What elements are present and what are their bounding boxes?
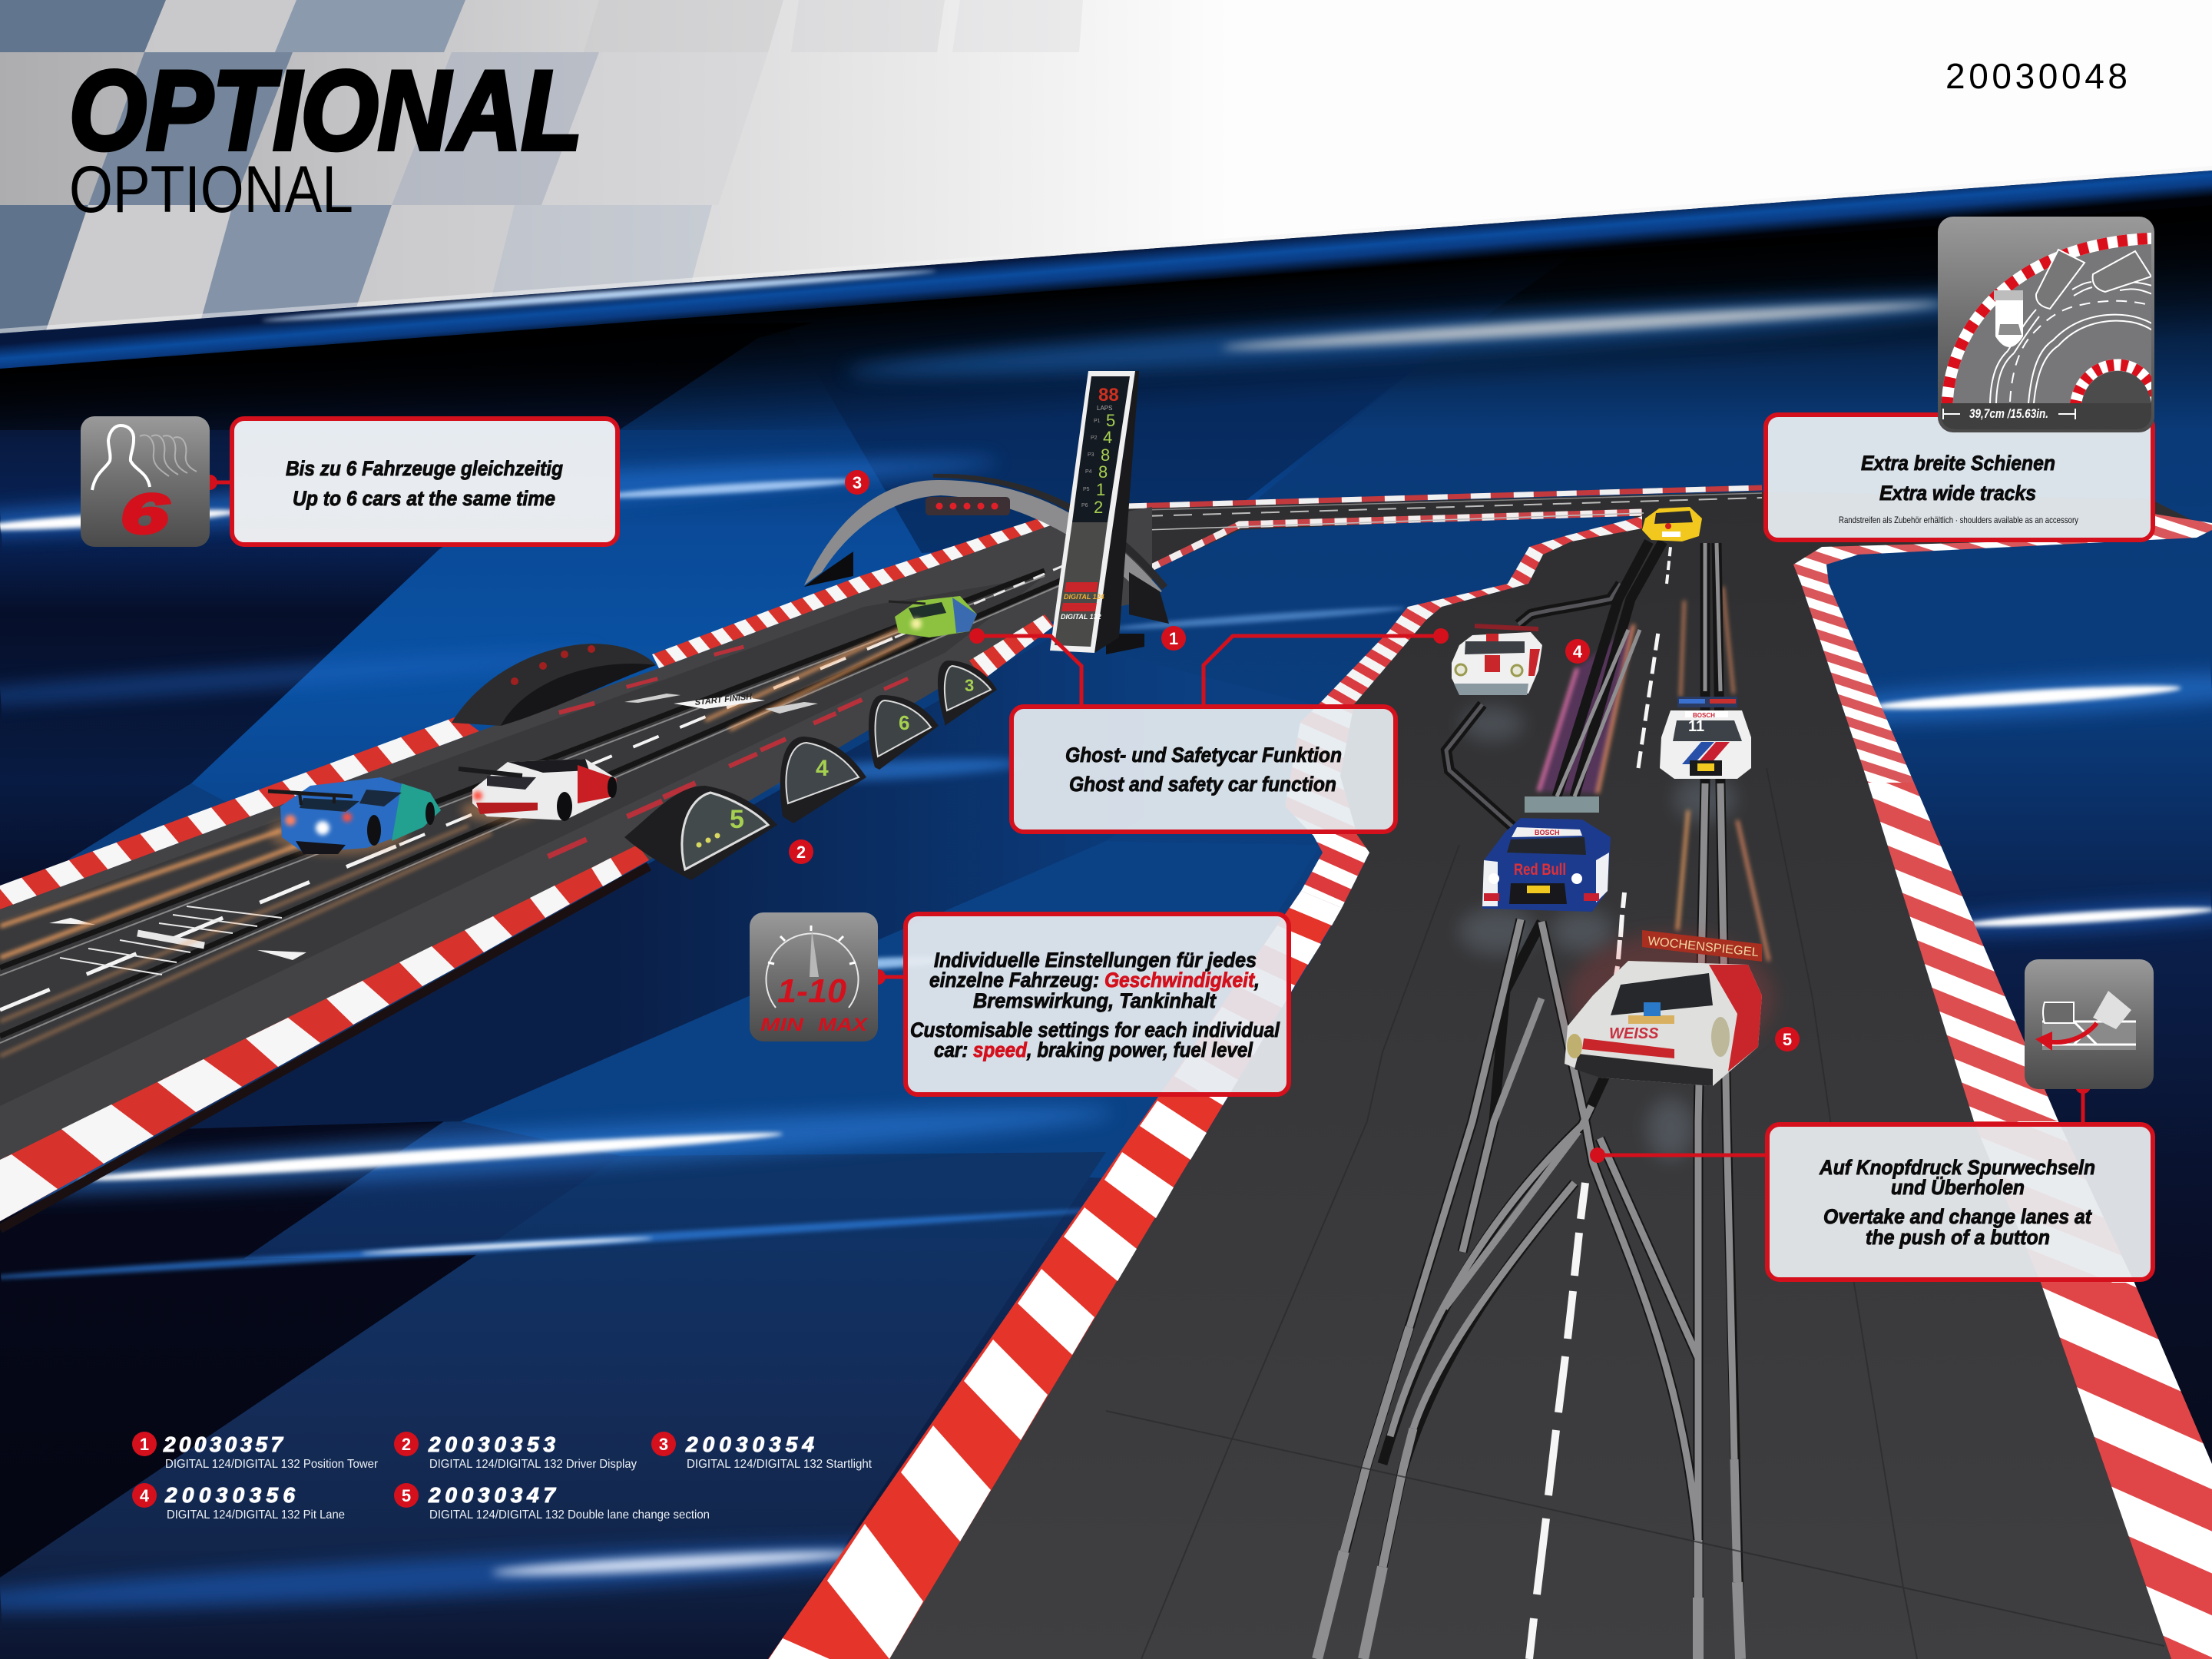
- left track kerbs: [0, 516, 1054, 1229]
- car: white Ferrari: [1565, 930, 1774, 1086]
- text: cars at the same time: [286, 457, 563, 510]
- text: lane change: Auf Knopfdruck Spurwechseln: [1819, 1156, 2095, 1179]
- badge 2: [789, 839, 813, 864]
- callout: lane change: [1590, 959, 2154, 1280]
- connector: [870, 969, 906, 985]
- icon: six drivers: [81, 416, 210, 547]
- text: lane change: und Überholen: [1891, 1176, 2025, 1199]
- car: white BMW safety car: BOSCH: [1693, 712, 1715, 719]
- position tower: 88: [1098, 385, 1119, 406]
- horizontal road lanes: [1144, 493, 1762, 530]
- start finish marking: [624, 692, 818, 714]
- car: white porsche: [1452, 624, 1542, 695]
- title: [69, 48, 582, 227]
- connector dot green car: [969, 628, 985, 644]
- position tower: P4: [1085, 469, 1092, 475]
- badge 3: [845, 470, 869, 495]
- dome 3: [869, 695, 939, 770]
- connector to green car: [977, 636, 1081, 705]
- legend item 5: 20030347: [428, 1483, 556, 1507]
- car: red white: [459, 759, 617, 822]
- connector dot white car: [1433, 628, 1449, 644]
- position tower: 2: [1094, 498, 1103, 517]
- car: white BMW safety car: [1660, 697, 1751, 779]
- startlight arch: [804, 474, 1169, 624]
- icon: speed gauge: [750, 912, 878, 1041]
- position tower: 4: [1103, 428, 1112, 447]
- panel: [906, 914, 1289, 1094]
- dome 4: 3: [965, 676, 974, 695]
- icon: wide curve: 39,7cm /15.63in.: [1969, 406, 2048, 421]
- legend item 5: DIGITAL 124/DIGITAL 132 Double lane change section: [429, 1508, 710, 1522]
- right track slots and lane change: [1106, 541, 2164, 1659]
- icon: lane change: [2025, 959, 2154, 1089]
- text: ghost function: Ghost and safety car function: [1069, 773, 1336, 796]
- badge 3: 3: [853, 473, 862, 492]
- text: settings: Individuelle Einstellungen für jedes: [934, 949, 1257, 972]
- right track centre dashes: [1529, 547, 1671, 1659]
- dome 2: 4: [816, 756, 829, 781]
- header panel with checkered flag: [0, 0, 2212, 333]
- arch bridge: [452, 644, 656, 726]
- title: OPTIONAL: [69, 48, 582, 173]
- track direction arrows: [49, 918, 306, 960]
- left track asphalt: [0, 507, 1152, 1221]
- right track kerbs: [768, 488, 2212, 1659]
- legend item 4: 4: [140, 1486, 150, 1505]
- icon: wide curve: [1938, 217, 2162, 434]
- pit lane slot: [1446, 584, 1621, 827]
- legend item 5: 5: [402, 1486, 411, 1505]
- position tower: P6: [1081, 503, 1088, 508]
- connector to white car: [1204, 636, 1441, 705]
- panel: [232, 419, 618, 545]
- dome 1: 5: [730, 805, 744, 834]
- position tower: 5: [1106, 411, 1115, 430]
- text: settings: [910, 949, 1280, 1061]
- panel: [1766, 415, 2153, 540]
- icon: speed gauge: 1-10: [777, 972, 847, 1010]
- badge 5: [1775, 1027, 1800, 1051]
- text: settings: car: speed, braking power, fuel level: [934, 1038, 1253, 1061]
- text: cars at the same time: Up to 6 cars at the same time: [293, 487, 555, 510]
- dome 3: 6: [899, 711, 909, 734]
- car: blue Audi: [1482, 796, 1611, 912]
- position tower: DIGITAL 132: [1061, 613, 1101, 621]
- header blue band: [0, 171, 2212, 369]
- legend item 2: 2: [402, 1435, 411, 1454]
- driver display domes: [624, 661, 997, 880]
- text: settings: Customisable settings for each individual: [910, 1018, 1280, 1041]
- text: extra wide tracks: Extra breite Schienen: [1861, 452, 2055, 475]
- legend item 1: 20030357: [163, 1432, 283, 1456]
- connector to crossover: [1590, 1147, 1767, 1163]
- legend item 3: 3: [659, 1435, 668, 1454]
- start finish marking: START FINISH: [694, 692, 753, 707]
- car: white Ferrari: WEISS: [1609, 1025, 1659, 1042]
- icon: six drivers: 6: [121, 484, 169, 545]
- legend item 5: [394, 1483, 710, 1522]
- text: cars at the same time: Bis zu 6 Fahrzeuge gleichzeitig: [286, 457, 563, 480]
- text: extra wide tracks: Extra wide tracks: [1879, 482, 2036, 505]
- badge 4: 4: [1573, 642, 1583, 661]
- car: yellow: [1642, 507, 1702, 541]
- legend item 1: 1: [140, 1435, 149, 1454]
- position tower: DIGITAL 124: [1064, 593, 1104, 601]
- callout: six cars: [81, 416, 618, 547]
- car: green: [889, 596, 977, 637]
- legend item 4: DIGITAL 124/DIGITAL 132 Pit Lane: [167, 1508, 345, 1522]
- legend item 3: DIGITAL 124/DIGITAL 132 Startlight: [687, 1458, 873, 1471]
- legend item 4: [132, 1483, 345, 1522]
- text: ghost function: Ghost- und Safetycar Funktion: [1065, 743, 1342, 767]
- car: blue Audi: BOSCH: [1535, 829, 1560, 836]
- panel: [1767, 1124, 2153, 1280]
- car: blue Audi: Red Bull: [1514, 861, 1566, 879]
- article number: 20030048: [1945, 56, 2128, 96]
- text: settings: Bremswirkung, Tankinhalt: [973, 989, 1217, 1012]
- dome 4: [938, 661, 997, 726]
- connector: [202, 475, 230, 490]
- position tower: P5: [1083, 487, 1090, 492]
- legend item 2: [394, 1432, 637, 1471]
- road glow patches: [1459, 707, 1736, 1160]
- car: white BMW safety car: 11: [1688, 718, 1704, 735]
- text: lane change: [1819, 1156, 2095, 1249]
- light trails on right track: [1538, 587, 1769, 961]
- car: blue teal: [268, 777, 441, 855]
- badge 4: [1565, 639, 1590, 664]
- callout: extra wide tracks: [1766, 217, 2162, 540]
- text: extra wide tracks: [1839, 452, 2078, 525]
- legend item 1: [132, 1432, 379, 1471]
- badge 5: 5: [1783, 1030, 1792, 1049]
- title: OPTIONAL: [69, 153, 353, 227]
- badge 1: [1161, 626, 1186, 651]
- legend: [132, 1432, 873, 1522]
- small track logos: [547, 645, 909, 859]
- text: settings: einzelne Fahrzeug: Geschwindigkeit,: [929, 969, 1260, 992]
- position tower: P2: [1091, 435, 1098, 441]
- legend item 3: 20030354: [685, 1432, 814, 1456]
- badge 2: 2: [796, 843, 806, 862]
- callout: ghost and safety car: [969, 628, 1449, 832]
- right track asphalt: [889, 492, 2212, 1659]
- callout: individual settings: [750, 912, 1289, 1094]
- position tower: P1: [1094, 419, 1101, 424]
- position tower: [1050, 371, 1144, 654]
- position tower: P3: [1088, 452, 1094, 458]
- icon: speed gauge: MIN: [760, 1015, 804, 1035]
- legend item 2: 20030353: [428, 1432, 555, 1456]
- position tower: 8: [1101, 445, 1110, 465]
- legend item 2: DIGITAL 124/DIGITAL 132 Driver Display: [429, 1458, 637, 1471]
- left track lanes: [0, 561, 1075, 1106]
- text: lane change: the push of a button: [1866, 1226, 2050, 1249]
- connector to icon: [2075, 1078, 2091, 1123]
- dome 1: [624, 786, 777, 880]
- panel: [1012, 707, 1396, 832]
- legend item 1: DIGITAL 124/DIGITAL 132 Position Tower: [165, 1458, 379, 1471]
- car: white Ferrari: WOCHENSPIEGEL: [1647, 935, 1760, 959]
- text: lane change: Overtake and change lanes at: [1823, 1205, 2092, 1228]
- text: ghost function: [1065, 743, 1342, 796]
- legend item 3: [651, 1432, 873, 1471]
- light trails on left track: [0, 628, 914, 1056]
- position tower: LAPS: [1097, 405, 1112, 412]
- position tower: 8: [1098, 462, 1108, 482]
- badge 1: 1: [1169, 629, 1178, 648]
- legend item 4: 20030356: [164, 1483, 295, 1507]
- dome 2: [780, 737, 866, 823]
- position tower: 1: [1096, 480, 1105, 499]
- icon: speed gauge: MAX: [818, 1015, 869, 1035]
- text: extra wide tracks: Randstreifen als Zubehör erhältlich · shoulders available as an accessory: [1839, 515, 2078, 525]
